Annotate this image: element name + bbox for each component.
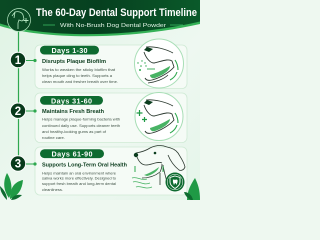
step marker 1	[10, 52, 37, 68]
badge: days 1-30: Days 1-30	[52, 46, 88, 55]
body text: saliva works more effectively. Designed to	[42, 176, 116, 180]
body text: helps plaque cling to teeth. Supports a	[42, 74, 113, 78]
panel: days 61-90	[35, 147, 187, 195]
body text	[42, 171, 116, 192]
subtitle: With No-Brush Dog Dental Powder	[60, 23, 166, 29]
body text: Helps manage plaque-forming bacteria with	[42, 118, 120, 122]
body text: clean mouth and fresher breath over time.	[42, 80, 118, 84]
heading: maintains fresh breath: Maintains Fresh Breath	[42, 109, 104, 115]
heading: supports long-term oral health: Supports Long-Term Oral Health	[42, 162, 127, 168]
icon: leaves	[0, 173, 23, 200]
icon: dog head	[8, 8, 30, 32]
body text	[42, 68, 118, 84]
illustration: dog profile	[132, 145, 185, 188]
badge: days 31-60: Days 31-60	[51, 96, 92, 105]
step marker 1: 1	[15, 55, 22, 67]
heading: disrupts plaque biofilm: Disrupts Plaque Biofilm	[42, 59, 106, 65]
body text: Works to weaken the sticky biofilm that	[42, 68, 115, 72]
subtitle ornaments	[43, 24, 183, 26]
timeline line	[18, 30, 20, 160]
body text: continued daily use. Supports cleaner teeth	[42, 124, 120, 128]
body text: Helps maintain an oral environment where	[42, 171, 116, 175]
badge: days 61-90: Days 61-90	[52, 150, 92, 159]
step marker 3	[10, 156, 37, 171]
badge: days 31-60	[40, 96, 103, 105]
icon: corner leaves	[184, 178, 200, 200]
badge: days 1-30	[40, 46, 99, 55]
illustration: mouth with fresh breath	[135, 92, 183, 140]
header banner	[0, 0, 200, 36]
body text: and healthy-looking gums as part of	[42, 130, 107, 134]
body text: cleanliness.	[42, 188, 63, 192]
step marker 3: 3	[15, 159, 21, 171]
badge: days 61-90	[40, 149, 104, 159]
step marker 2	[10, 103, 37, 118]
step marker 2: 2	[15, 106, 21, 118]
illustration: mouth with biofilm	[134, 39, 184, 88]
icon: shield tooth badge	[166, 172, 184, 192]
body text: support fresh breath and long-term dental	[42, 182, 116, 186]
body text	[42, 118, 120, 140]
body text: routine care.	[42, 136, 65, 140]
panel: days 1-30	[35, 45, 187, 88]
panel: days 31-60	[35, 93, 187, 142]
